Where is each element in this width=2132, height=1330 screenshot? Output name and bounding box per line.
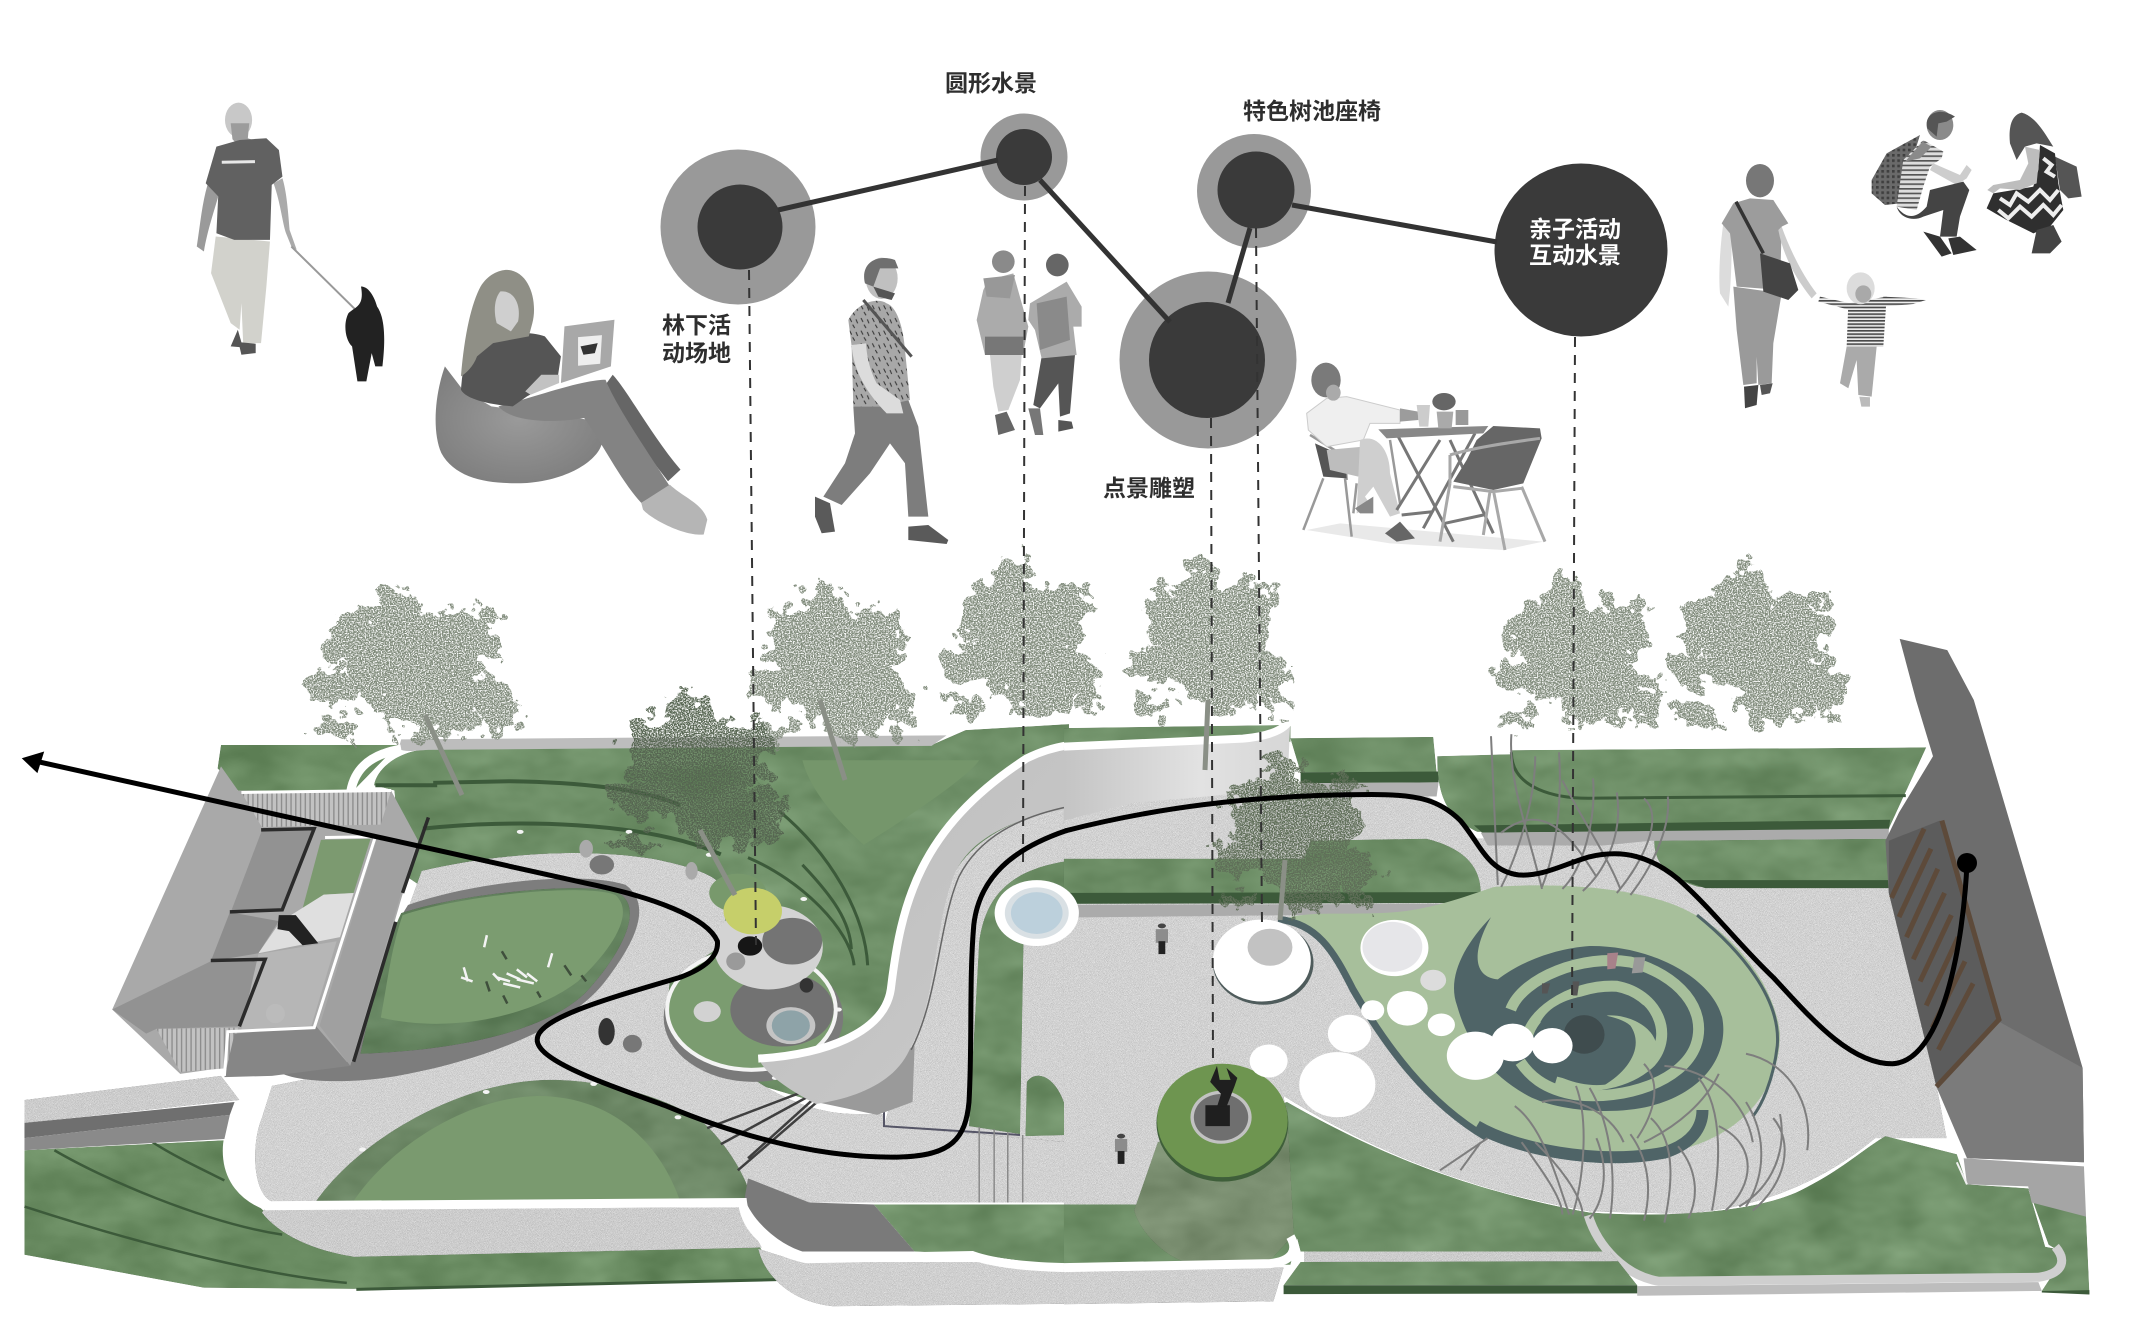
south-centre strips — [1284, 1252, 2089, 1295]
south planter wall — [758, 1249, 1069, 1306]
south-east wall base — [1637, 1282, 2042, 1296]
white kerbs — [227, 1102, 1069, 1268]
inner triangular lawn — [802, 760, 979, 845]
S-shaped feature wall — [758, 745, 1069, 1115]
connector lines between nodes — [778, 160, 1497, 322]
stairs — [707, 1092, 819, 1170]
wire sculptures north — [1491, 734, 1668, 895]
tree 5 — [1493, 578, 1659, 727]
node: understory activity area — [660, 150, 816, 304]
plaza steps — [979, 1127, 1023, 1202]
dashed leader lines — [749, 186, 1575, 1065]
lawn lights — [359, 830, 842, 1151]
west building — [112, 766, 428, 1077]
entourage: two children walking — [977, 250, 1082, 435]
label: understory activity area: 动场地 — [662, 340, 731, 366]
north-east lawn terraces — [1290, 737, 1926, 888]
plan: west half — [24, 724, 1069, 1306]
oval lawn with bird flock — [279, 878, 639, 1081]
sculpture lawn and statue — [1156, 1064, 1288, 1182]
grass: central base lawn — [374, 724, 1069, 1102]
tree trunks — [425, 700, 1285, 920]
circular activity lawn with discs — [664, 874, 843, 1082]
spiral fountain — [1278, 885, 1780, 1157]
label: sculpture: 点景雕塑 — [1103, 475, 1195, 501]
background trees — [302, 558, 1844, 920]
north gravel edge strip — [398, 735, 947, 751]
sculpture forecourt lawn — [1134, 1106, 1294, 1263]
white curved kerb — [351, 749, 401, 791]
label: understory activity area: 林下活 — [662, 312, 731, 338]
white stepping discs — [1250, 920, 1573, 1117]
central planter — [1032, 839, 1481, 918]
S-wall: east end — [1064, 718, 1290, 821]
grass: south centre — [1064, 1102, 1606, 1267]
people on west path — [579, 840, 698, 1053]
east building with timber screen — [1885, 639, 2086, 1217]
tree 1 — [302, 585, 516, 738]
entourage: cafe table and seated man — [1303, 363, 1545, 550]
entourage: crouching couple — [1872, 110, 2082, 257]
plan: east half — [995, 639, 2089, 1304]
entourage: man walking dog — [197, 103, 384, 381]
label: family water play: 亲子活动 — [1529, 216, 1621, 242]
circular water feature — [995, 880, 1079, 946]
green planter by pond — [884, 861, 1069, 1136]
grass: top band over wall — [1064, 725, 1290, 749]
south planter wall east — [1064, 1237, 1294, 1304]
retaining wall face — [262, 1207, 762, 1257]
tree 4 — [1130, 558, 1287, 716]
label: family water play: 互动水景 — [1529, 242, 1621, 268]
tree 3 — [942, 558, 1099, 716]
route: east section — [1066, 794, 1967, 1064]
gravel: central plaza — [1064, 780, 1947, 1214]
circulation route with arrow — [22, 751, 1977, 1157]
label: family water play — [1529, 216, 1621, 268]
plaza people — [1115, 924, 1168, 1164]
label: understory activity area — [662, 312, 731, 366]
south-east kerb — [1588, 1215, 2062, 1281]
tree 8 on plan — [1212, 754, 1373, 912]
entourage: walking man — [815, 258, 948, 544]
grass: north-west corner — [218, 745, 398, 790]
entrance ramp — [24, 1076, 239, 1150]
sunken road — [745, 1178, 915, 1252]
route start dot — [1957, 853, 1977, 873]
tree 2 — [750, 582, 916, 740]
node: tree pool seat — [1197, 134, 1311, 248]
grass: south-centre — [874, 1205, 1069, 1268]
bottom lawn — [316, 1080, 751, 1201]
node: sculpture — [1120, 272, 1296, 448]
entourage: mother and child — [1719, 164, 1926, 408]
site plan — [24, 639, 2089, 1306]
planting terrace lines — [375, 781, 868, 965]
tree 7 on plan — [607, 693, 786, 851]
grass: south-east lawn — [1590, 1136, 2066, 1279]
route arrowhead — [22, 751, 44, 773]
route: west section — [41, 762, 1066, 1157]
gravel: path behind S-wall — [884, 807, 1069, 1142]
grass: far east strip — [2028, 1188, 2089, 1294]
entourage: woman on bean bag — [436, 270, 707, 535]
wire sculptures south — [1440, 1054, 1808, 1223]
gravel: west path — [255, 853, 1069, 1202]
node: round water feature — [980, 114, 1068, 200]
tree pool seat — [1213, 919, 1314, 1005]
tree 6 — [1665, 566, 1844, 724]
node: family water play — [1494, 164, 1668, 336]
label: tree pool seat: 特色树池座椅 — [1243, 98, 1381, 124]
grass: south-west slope — [24, 1140, 777, 1289]
label: round water feature: 圆形水景 — [945, 70, 1037, 96]
